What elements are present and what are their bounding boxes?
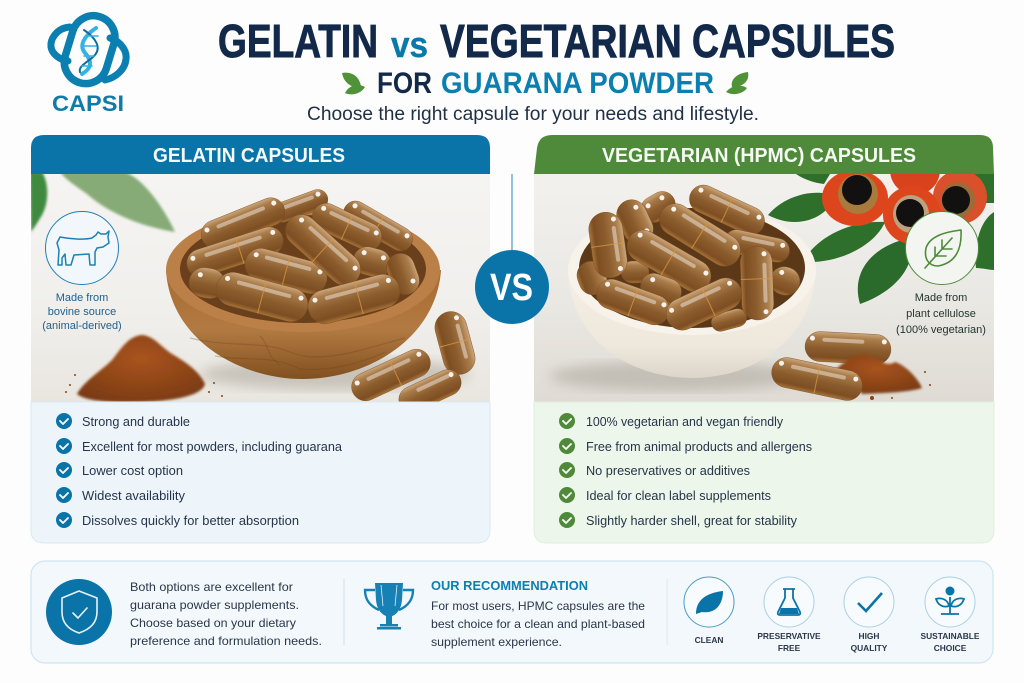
gelatin benefits list: Strong and durable: [82, 415, 190, 429]
feature: high quality: QUALITY: [851, 643, 888, 653]
summary text: guarana powder supplements.: [130, 598, 299, 612]
gelatin benefits list: [31, 402, 490, 543]
source badge: plant: (100% vegetarian): [896, 324, 986, 336]
guarana leaves: [768, 174, 994, 304]
icon: left leaves: [342, 73, 365, 94]
bowl shadow: [550, 361, 800, 391]
title: vs: [391, 24, 428, 65]
blurred leaves: [30, 172, 175, 232]
feature: high quality: [844, 577, 894, 653]
recommendation text: supplement experience.: [431, 635, 562, 649]
vegetarian benefits list: 100% vegetarian and vegan friendly: [586, 415, 784, 429]
loose capsule and guarana powder pile: [769, 331, 931, 403]
capsules in bowl: [573, 180, 804, 335]
gelatin benefits list: Excellent for most powders, including guarana: [82, 440, 342, 454]
loose capsules: [351, 311, 476, 402]
VS badge: VS: [490, 267, 533, 309]
icon: shield: [46, 579, 112, 645]
feature: sustainable choice: CHOICE: [934, 643, 967, 653]
icon: cow: [57, 231, 109, 265]
summary text: preference and formulation needs.: [130, 634, 322, 648]
logo wordmark: CAPSI: [52, 91, 124, 116]
guarana fruits: [822, 174, 987, 244]
icon: capsule and DNA mark: [51, 10, 126, 89]
panel: bottom summary: [31, 561, 993, 663]
guarana powder pile: [65, 335, 223, 402]
vegetarian benefits list: Ideal for clean label supplements: [586, 489, 771, 503]
ceramic bowl: [569, 280, 814, 378]
recommendation text: [431, 578, 645, 649]
title: [218, 15, 895, 67]
source badge: plant: [896, 212, 986, 336]
vegetarian benefits list: Slightly harder shell, great for stability: [586, 514, 798, 528]
feature: preservative free: FREE: [778, 643, 801, 653]
vegetarian header: VEGETARIAN (HPMC) CAPSULES: [602, 145, 916, 167]
vegetarian photo: ceramic bowl of capsules and guarana fruit: [534, 174, 994, 402]
vegetarian benefits list: [534, 402, 994, 543]
vegetarian benefits list: No preservatives or additives: [586, 464, 750, 478]
VS badge: [475, 174, 549, 324]
summary text: [130, 580, 322, 648]
recommendation text: For most users, HPMC capsules are the: [431, 599, 645, 613]
feature: clean: [684, 577, 734, 645]
vegetarian header: [534, 135, 994, 174]
panel: vegetarian capsules: [534, 135, 994, 543]
title: VEGETARIAN CAPSULES: [440, 15, 895, 67]
source badge: bovine: (animal-derived): [42, 320, 122, 332]
vegetarian benefits list: Free from animal products and allergens: [586, 440, 812, 454]
icon: trophy: [365, 583, 413, 630]
icon: right leaves: [726, 72, 748, 94]
logo: CAPSI: [51, 10, 126, 116]
gelatin benefits list: Widest availability: [82, 489, 186, 503]
summary text: Both options are excellent for: [130, 580, 293, 594]
feature: sustainable choice: SUSTAINABLE: [921, 631, 980, 641]
feature: preservative free: PRESERVATIVE: [757, 631, 821, 641]
capsules in bowl: [183, 187, 423, 328]
gelatin photo: wooden bowl of capsules: [30, 172, 490, 417]
wooden bowl: [166, 270, 441, 379]
source badge: bovine: Made from: [56, 292, 108, 304]
panel: gelatin capsules: [30, 135, 490, 543]
icon: leaf: [925, 230, 961, 268]
source badge: bovine: bovine source: [48, 306, 116, 318]
bowl shadow: [200, 358, 470, 390]
feature: clean: CLEAN: [695, 635, 723, 645]
title: GELATIN: [218, 15, 378, 67]
feature: high quality: HIGH: [859, 631, 879, 641]
tagline: Choose the right capsule for your needs and lifestyle.: [307, 104, 759, 125]
gelatin header: GELATIN CAPSULES: [153, 145, 345, 167]
recommendation text: best choice for a clean and plant-based: [431, 617, 645, 631]
subtitle: FOR: [377, 67, 432, 100]
recommendation text: OUR RECOMMENDATION: [431, 578, 588, 593]
feature: preservative free: [757, 577, 821, 653]
gelatin header: [31, 135, 490, 174]
gelatin benefits list: Dissolves quickly for better absorption: [82, 514, 299, 528]
gelatin benefits list: Lower cost option: [82, 464, 183, 478]
subtitle: GUARANA POWDER: [441, 67, 714, 100]
source badge: plant: plant cellulose: [906, 308, 976, 320]
feature: sustainable choice: [921, 577, 980, 653]
source badge: bovine: [42, 212, 122, 332]
summary text: Choose based on your dietary: [130, 616, 296, 630]
source badge: plant: Made from: [915, 292, 967, 304]
